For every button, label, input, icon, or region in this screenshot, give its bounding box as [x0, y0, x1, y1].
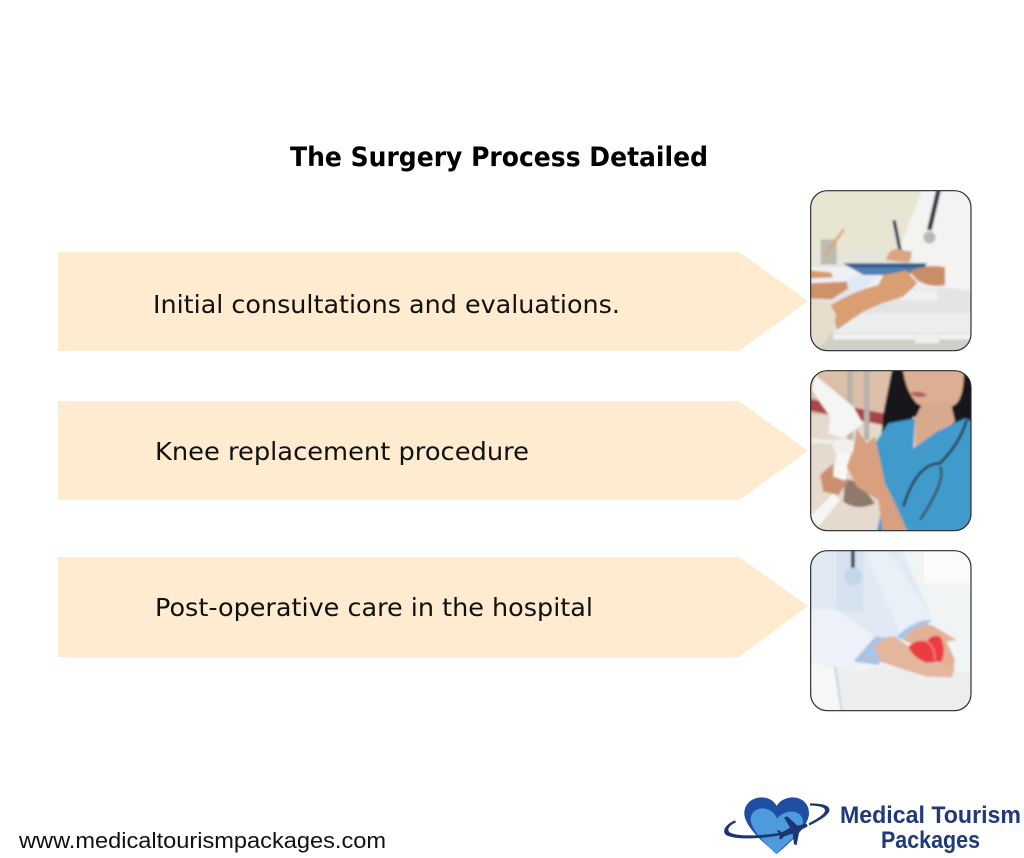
arrow: step 2: [58, 401, 808, 500]
step 1 text: Initial consultations and evaluations.: [153, 290, 620, 319]
arrow: step 3: [58, 557, 808, 657]
logo: heart and plane: [724, 797, 829, 854]
website url: www.medicaltourismpackages.com: [18, 828, 386, 853]
logo wordmark: Packages: [881, 827, 980, 854]
step 2 text: Knee replacement procedure: [155, 437, 529, 466]
photo: doctor consultation: [807, 187, 977, 357]
logo wordmark: [840, 802, 1021, 854]
arrow: step 1: [58, 252, 808, 351]
step 3 text: Post-operative care in the hospital: [155, 593, 593, 622]
title: The Surgery Process Detailed: [290, 142, 708, 173]
photo: doctor holding red heart: [807, 547, 977, 717]
photo: nurse with knee model: [807, 367, 977, 537]
